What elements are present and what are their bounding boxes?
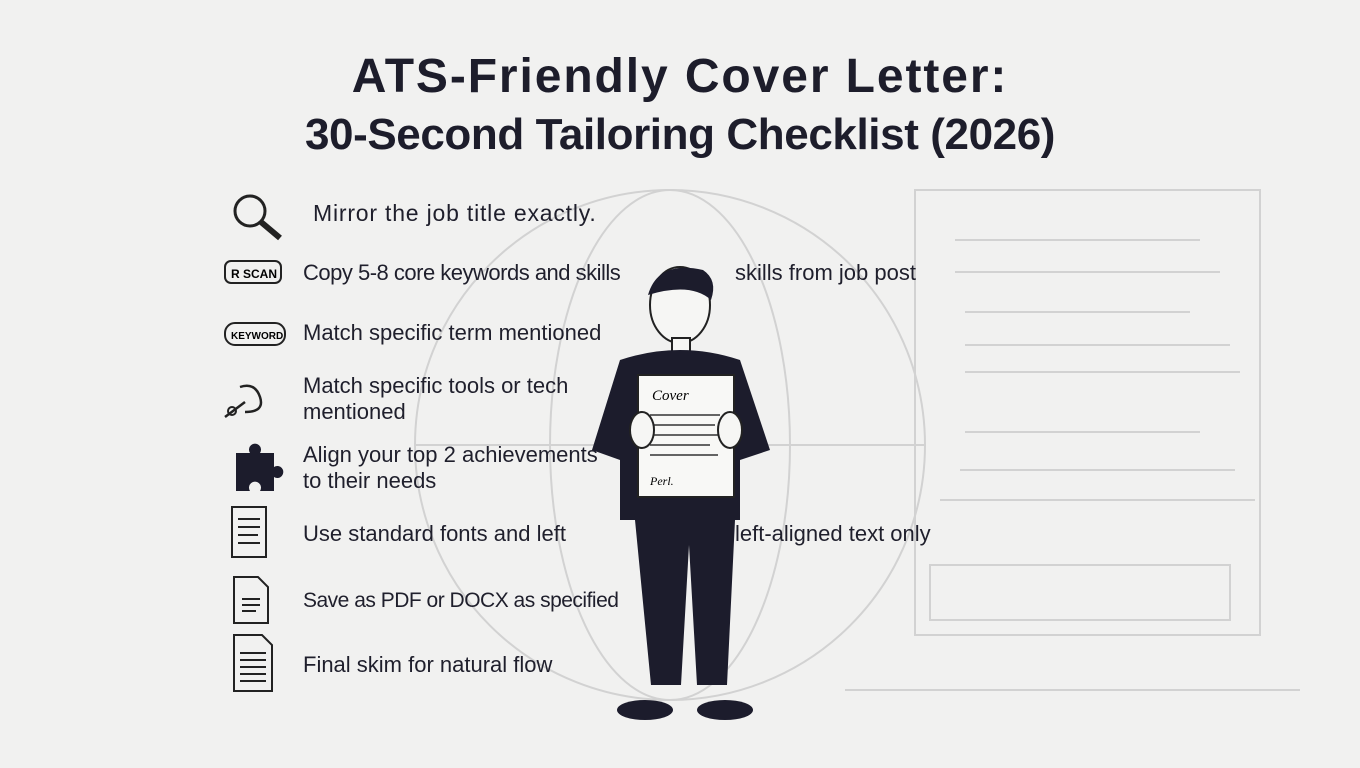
icon: keyword badge: KEYWORD (231, 331, 283, 342)
checklist (224, 194, 286, 692)
icon: magnifier (234, 194, 282, 240)
text: Match specific term mentioned (303, 320, 601, 345)
text: skills from job post (735, 260, 916, 285)
icon: puzzle (236, 444, 284, 491)
text: Final skim for natural flow (303, 652, 552, 677)
title: ATS-Friendly Cover Letter: (352, 50, 1008, 103)
text: Use standard fonts and left (303, 521, 566, 546)
text: Copy 5-8 core keywords and skills (303, 260, 620, 285)
icon: document (231, 506, 267, 558)
icon: scan badge: R SCAN (231, 267, 277, 281)
text: to their needs (303, 468, 436, 493)
icon: scan badge (224, 260, 282, 284)
icon: tools (224, 384, 262, 418)
icon: keyword badge (224, 322, 286, 346)
text: left-aligned text only (735, 521, 931, 546)
text: mentioned (303, 399, 406, 424)
text: Match specific tools or tech (303, 373, 568, 398)
person holding cover letter: Cover (652, 388, 689, 404)
icon: file (233, 576, 269, 624)
person holding cover letter: Perl. (649, 474, 674, 488)
person holding cover letter (592, 266, 770, 720)
text: 30-Second Tailoring Checklist (2026) (305, 110, 1055, 159)
text: Save as PDF or DOCX as specified (303, 589, 618, 612)
item texts: Mirror the job title exactly. (313, 200, 597, 226)
text: Align your top 2 achievements (303, 442, 598, 467)
icon: page (233, 634, 273, 692)
